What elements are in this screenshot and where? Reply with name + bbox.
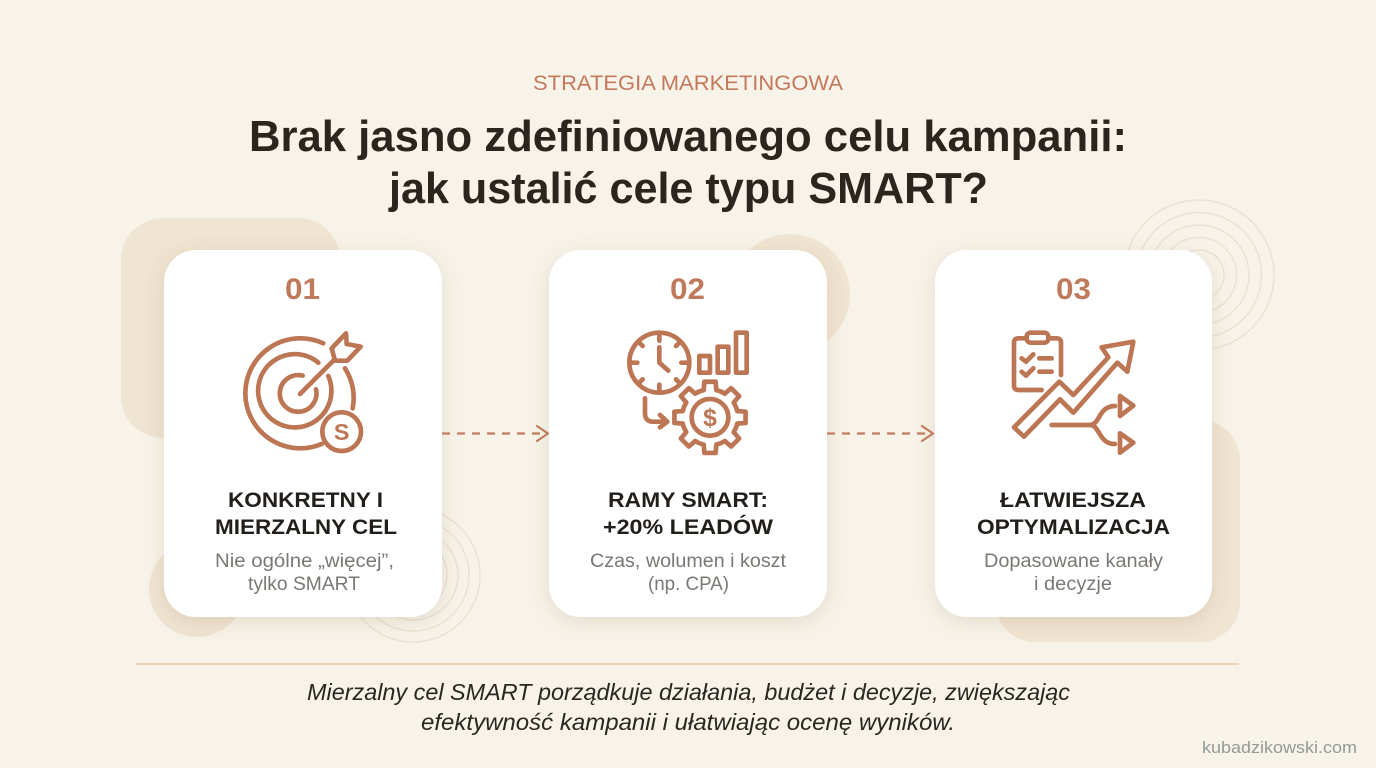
summary text: efektywność kampanii i ułatwiając ocenę wyników. — [421, 709, 955, 735]
icon: target with arrow and coin — [245, 333, 361, 451]
summary text: Mierzalny cel SMART porządkuje działania, budżet i decyzje, zwiększając — [307, 679, 1070, 705]
heading — [603, 488, 774, 539]
arrow: card 02 to 03 — [827, 426, 933, 441]
icon: clipboard, rising arrow and fork — [1014, 333, 1133, 453]
title: Brak jasno zdefiniowanego celu kampanii: — [249, 112, 1127, 161]
icon: clock, bars and gear — [629, 333, 747, 453]
description: Dopasowane kanały — [984, 551, 1164, 572]
arrow: card 01 to 02 — [442, 426, 548, 441]
heading: MIERZALNY CEL — [215, 515, 397, 539]
heading: ŁATWIEJSZA — [1000, 488, 1146, 512]
description: (np. CPA) — [648, 574, 729, 595]
summary text — [307, 679, 1070, 735]
panel: card 03 — [935, 250, 1212, 617]
source credit: kubadzikowski.com — [1202, 739, 1357, 757]
title — [249, 112, 1127, 213]
heading — [215, 488, 397, 539]
number 03: 03 — [1056, 273, 1091, 306]
heading: OPTYMALIZACJA — [977, 515, 1170, 539]
divider line — [136, 663, 1239, 665]
heading: KONKRETNY I — [228, 488, 383, 512]
title: jak ustalić cele typu SMART? — [388, 164, 988, 213]
eyebrow label: STRATEGIA MARKETINGOWA — [533, 72, 843, 95]
heading: RAMY SMART: — [608, 488, 768, 512]
description — [215, 551, 394, 595]
icon: target with arrow and coin: S — [334, 419, 349, 445]
heading — [977, 488, 1170, 539]
panel: card 02 — [549, 250, 827, 617]
description — [590, 551, 787, 595]
description: tylko SMART — [248, 574, 360, 595]
icon: clock, bars and gear: $ — [703, 405, 717, 432]
number 02: 02 — [670, 273, 705, 306]
number 01: 01 — [285, 273, 320, 306]
description: Czas, wolumen i koszt — [590, 551, 787, 572]
description: Nie ogólne „więcej”, — [215, 551, 394, 572]
panel: card 01 — [164, 250, 442, 617]
background decorative shapes — [121, 200, 1274, 642]
description — [984, 551, 1164, 595]
description: i decyzje — [1034, 574, 1112, 595]
heading: +20% LEADÓW — [603, 514, 774, 539]
